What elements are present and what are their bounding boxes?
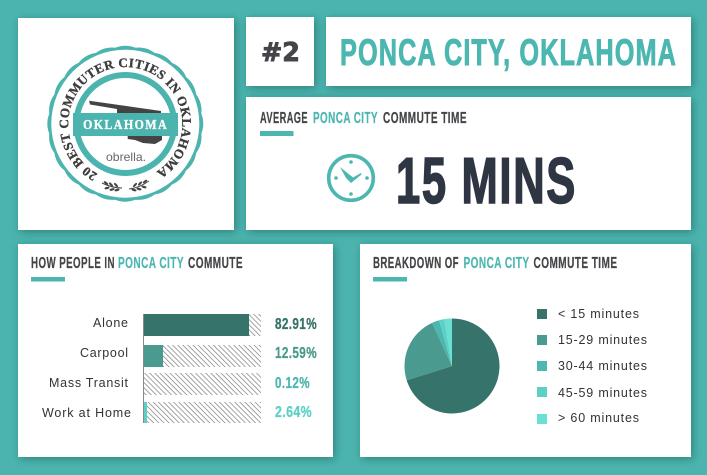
logo: obrella: obrella.	[106, 150, 146, 164]
icon: laurels	[102, 179, 149, 192]
heading	[373, 255, 618, 272]
heading: PONCA CITY	[313, 110, 378, 127]
bar chart: 12.59%	[275, 345, 317, 362]
heading: AVERAGE	[260, 110, 308, 127]
heading: COMMUTE TIME	[534, 255, 618, 272]
bar chart: Alone	[93, 316, 128, 330]
panel: how people commute	[18, 244, 333, 457]
icon: clock	[329, 156, 373, 200]
legend: 15-29 minutes	[558, 333, 647, 347]
legend	[537, 307, 647, 425]
legend: < 15 minutes	[558, 307, 639, 321]
bar chart: Mass Transit	[49, 376, 129, 390]
rank number: #2	[261, 38, 300, 68]
heading: HOW PEOPLE IN	[31, 255, 115, 272]
legend: 30-44 minutes	[558, 359, 647, 373]
panel: city title	[326, 17, 691, 86]
pie chart	[404, 318, 499, 414]
badge: curved title: 20 BEST COMMUTER CITIES IN OKLAHOMA	[60, 58, 191, 181]
panel: badge	[16, 16, 240, 236]
heading	[31, 255, 243, 272]
bar chart	[42, 314, 317, 423]
heading: BREAKDOWN OF	[373, 255, 459, 272]
legend: 45-59 minutes	[558, 386, 647, 400]
stat: 15 mins: 15 MINS	[396, 144, 577, 217]
badge: Oklahoma banner	[73, 113, 178, 136]
icon: Oklahoma state map	[89, 101, 162, 144]
badge: scalloped seal	[43, 42, 207, 206]
panel: commute time breakdown	[360, 244, 691, 457]
panel: rank	[246, 17, 314, 86]
heading: PONCA CITY	[464, 255, 530, 272]
panel: average commute time	[246, 97, 691, 230]
badge: Oklahoma banner: OKLAHOMA	[83, 117, 168, 132]
legend: > 60 minutes	[558, 411, 639, 425]
bar chart: 0.12%	[275, 375, 310, 392]
bar chart: 2.64%	[275, 404, 312, 421]
heading: PONCA CITY	[118, 255, 184, 272]
bar chart: 82.91%	[275, 316, 317, 333]
bar chart: Carpool	[80, 346, 128, 360]
heading: COMMUTE TIME	[383, 110, 467, 127]
heading: COMMUTE	[188, 255, 243, 272]
heading	[260, 110, 467, 127]
bar chart: Work at Home	[42, 406, 131, 420]
